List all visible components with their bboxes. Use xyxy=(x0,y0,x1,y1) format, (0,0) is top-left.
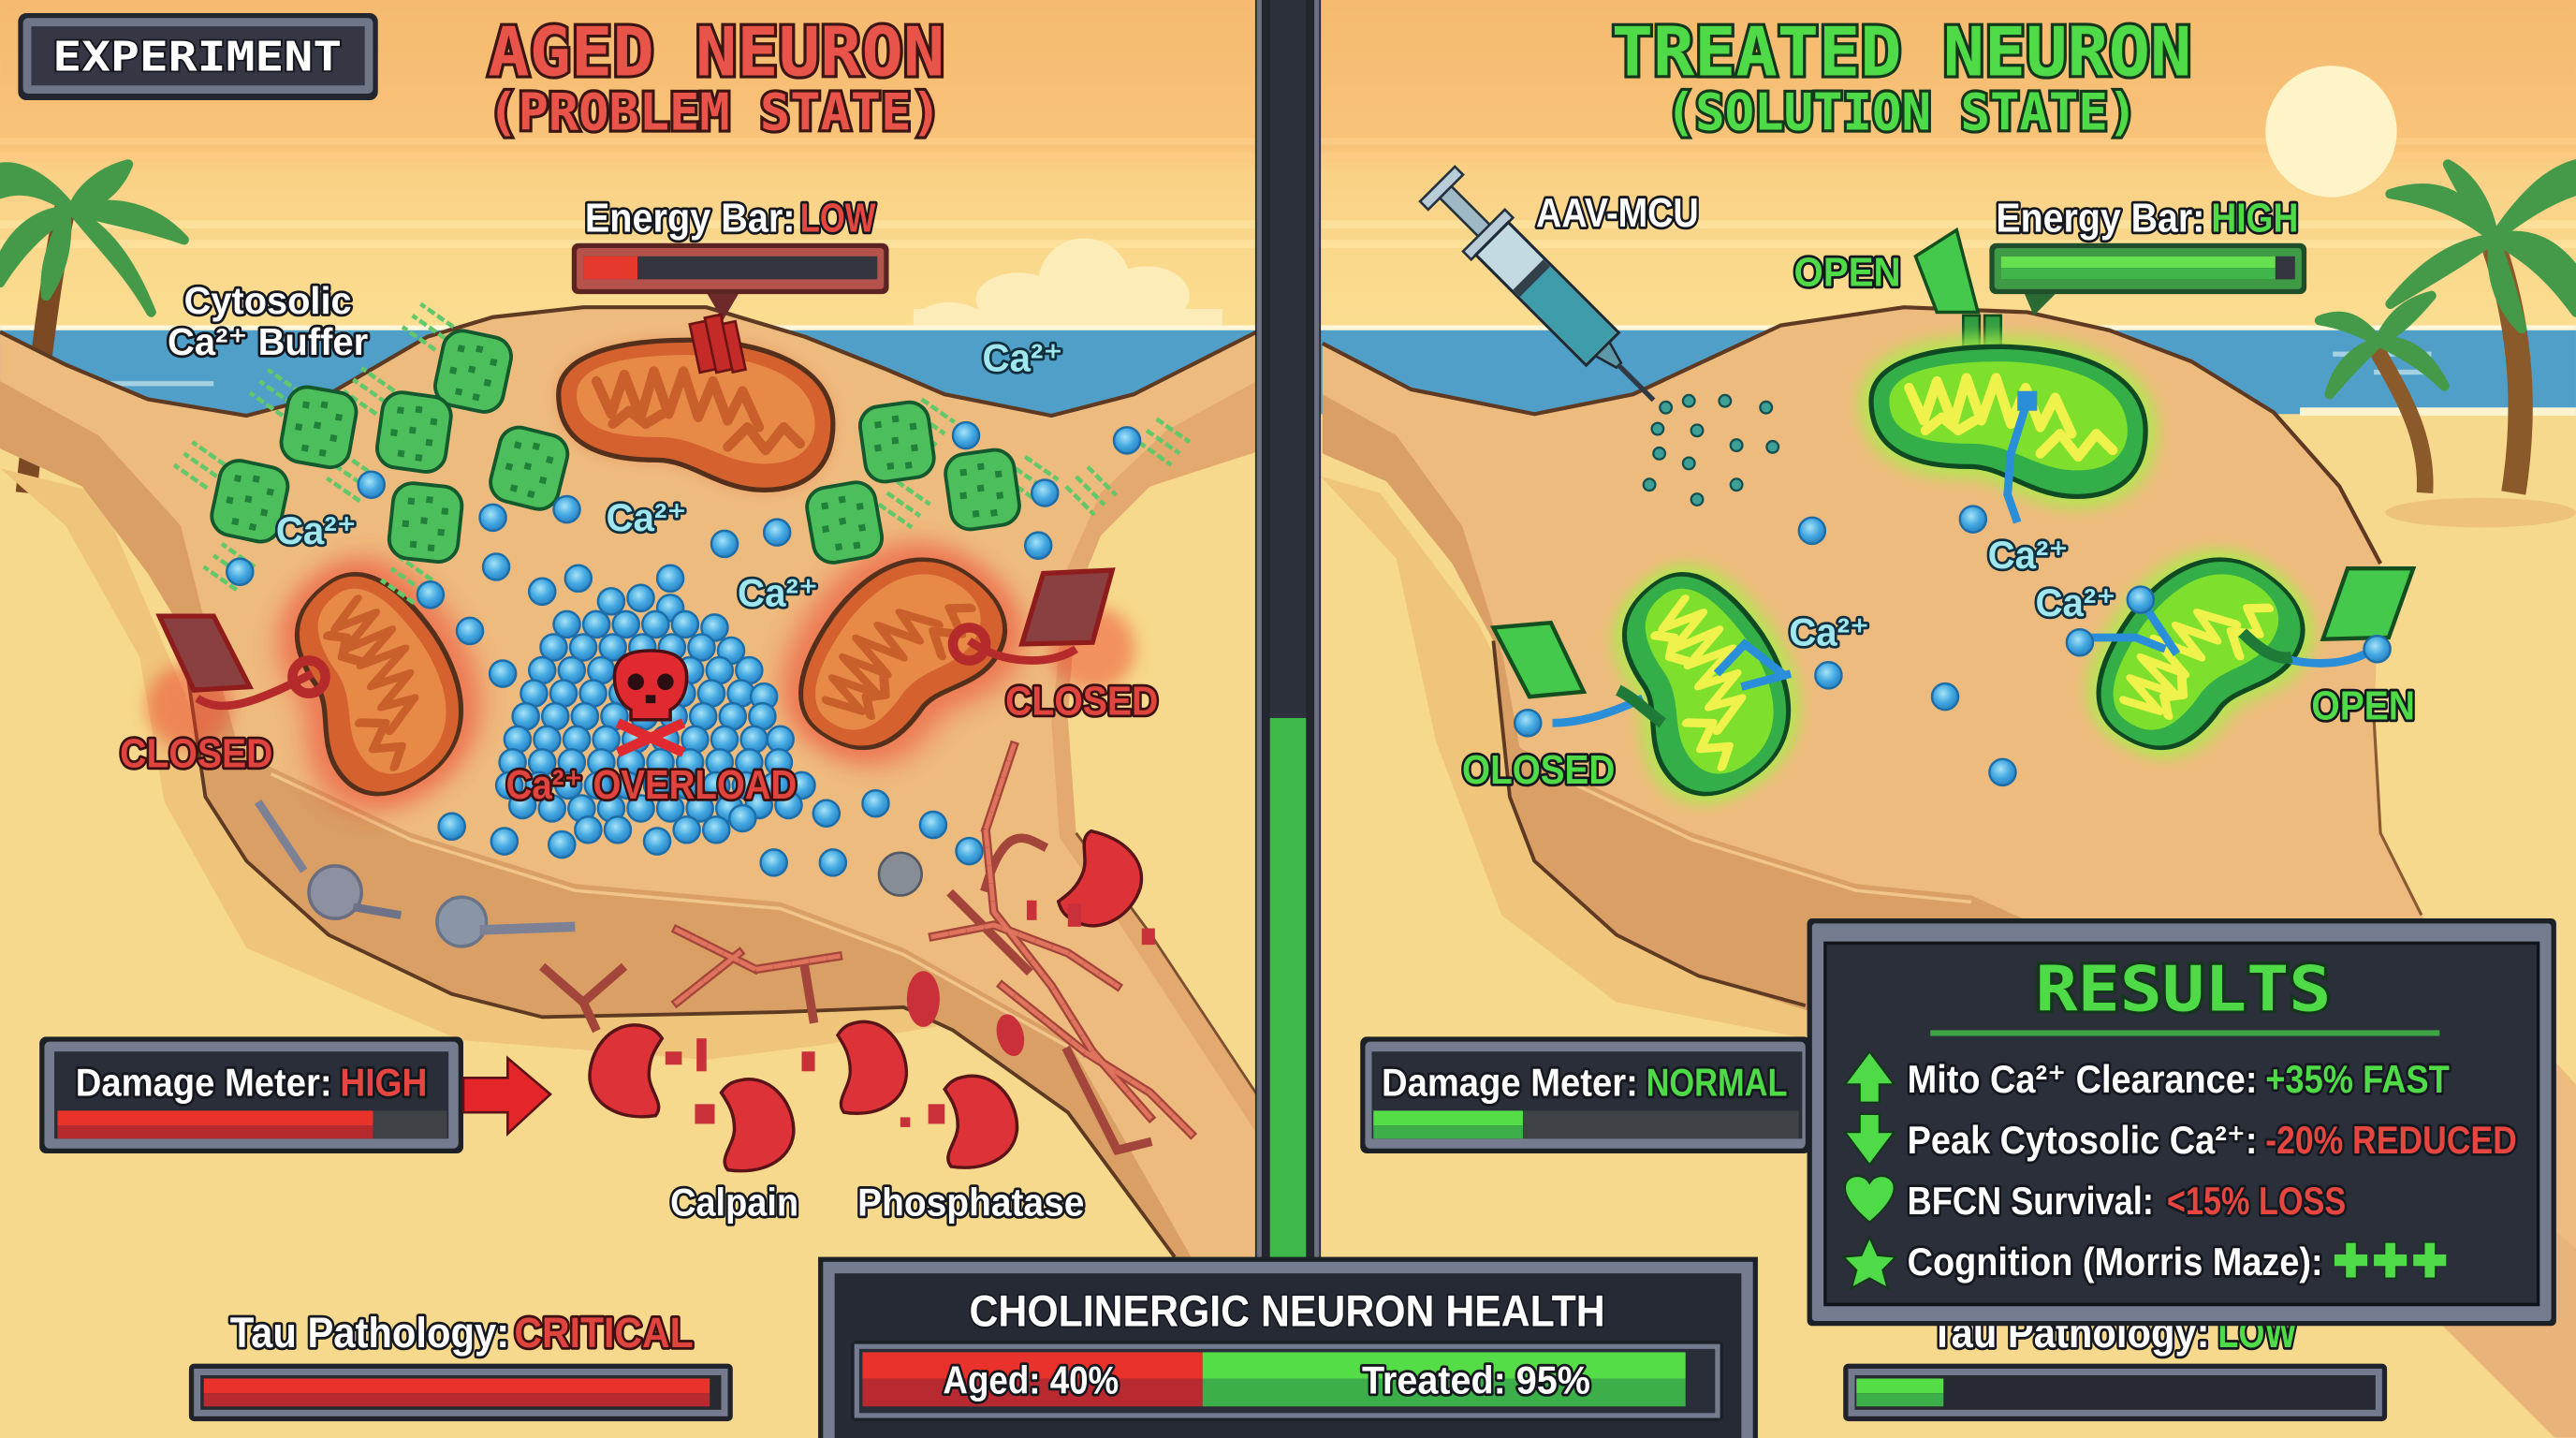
labels: closed gates: CLOSED xyxy=(120,731,272,777)
open channel gate: top xyxy=(1915,230,2001,368)
damage meter: high: Damage Meter: xyxy=(76,1061,332,1105)
labels: calcium ions, treated: Ca²⁺ xyxy=(2036,580,2116,624)
energy bar: high xyxy=(1989,195,2306,315)
icon: syringe xyxy=(1416,163,1675,421)
tau pathology: critical: CRITICAL xyxy=(514,1309,694,1357)
result row: mito calcium clearance: Mito Ca²⁺ Clearance: xyxy=(1908,1057,2257,1101)
sea xyxy=(0,325,2576,418)
tau pathology: critical: Tau Pathology: xyxy=(230,1309,509,1357)
panel: results xyxy=(1808,918,2556,1326)
title: treated neuron: TREATED NEURON xyxy=(1612,13,2191,92)
label: cytosolic buffer: Ca²⁺ Buffer xyxy=(168,320,368,363)
labels: calpain, phosphatase xyxy=(670,1181,1084,1225)
labels: calcium ions, aged xyxy=(276,336,1063,615)
palm: left xyxy=(0,165,184,493)
panel: cholinergic neuron health: CHOLINERGIC NEURON HEALTH xyxy=(970,1286,1605,1336)
result row: peak cytosolic calcium xyxy=(1845,1114,2517,1165)
open channel gate: right xyxy=(2243,568,2413,663)
mitochondrion: top, treated xyxy=(1871,346,2145,522)
arrow: damage to enzymes xyxy=(463,1058,550,1134)
labels: calcium ions, aged: Ca²⁺ xyxy=(607,495,687,539)
energy bar: low: Energy Bar: xyxy=(585,195,795,241)
tau pathology: low: Tau Pathology: xyxy=(1930,1309,2210,1357)
mitochondrion: right, treated xyxy=(2071,524,2323,790)
closed channel gate: right xyxy=(953,570,1135,692)
panel: cholinergic neuron health: Treated: 95% xyxy=(1362,1357,1590,1401)
label: open, top: OPEN xyxy=(1794,249,1901,295)
panel: cholinergic neuron health: Aged: 40% xyxy=(943,1357,1119,1401)
sun xyxy=(2265,66,2397,198)
tau pathology: low: LOW xyxy=(2217,1309,2297,1357)
palm: right large and small xyxy=(2320,165,2576,527)
labels: calcium ions, treated: Ca²⁺ xyxy=(1988,533,2069,577)
neuron body: treated xyxy=(1321,307,2576,1438)
viral particles xyxy=(1644,395,1778,506)
tau pathology: low xyxy=(1843,1309,2387,1421)
result row: peak cytosolic calcium: -20% REDUCED xyxy=(2265,1118,2517,1162)
cytosolic calcium buffers xyxy=(174,304,1190,603)
result row: BFCN survival xyxy=(1845,1176,2346,1223)
result row: BFCN survival: <15% LOSS xyxy=(2167,1179,2346,1223)
labels: calcium ions, aged: Ca²⁺ xyxy=(738,571,818,615)
panel: treated neuron (solution state) xyxy=(1321,13,2576,1438)
result row: cognition xyxy=(1843,1238,2446,1288)
labels: closed gates: CLOSED xyxy=(1005,678,1158,724)
panel: aged neuron (problem state) xyxy=(0,13,1257,1421)
damage meter: normal xyxy=(1360,1036,1810,1153)
labels: calpain, phosphatase: Phosphatase xyxy=(857,1181,1084,1225)
broken tau filaments xyxy=(546,746,1191,1151)
result row: cognition: Cognition (Morris Maze): xyxy=(1908,1240,2323,1284)
tau pathology: critical xyxy=(189,1309,733,1421)
calcium overload cluster xyxy=(227,422,1140,875)
mitochondrion: top, aged xyxy=(559,315,833,490)
energy bar: low: LOW xyxy=(800,195,876,241)
labels: gate states xyxy=(1462,683,2415,793)
badge: experiment xyxy=(18,13,378,100)
energy bar: high: HIGH xyxy=(2211,195,2298,241)
label: AAV-MCU: AAV-MCU xyxy=(1536,190,1699,236)
damage meter: high xyxy=(39,1036,463,1153)
calcium uptake into mitochondria xyxy=(1515,506,2391,785)
sand xyxy=(0,416,2576,1438)
mitochondrion: left, aged xyxy=(247,550,498,815)
labels: calcium ions, treated: Ca²⁺ xyxy=(1789,610,1869,654)
labels: closed gates xyxy=(120,678,1158,777)
mitochondrion: left, treated xyxy=(1574,550,1825,815)
labels: calcium ions, aged: Ca²⁺ xyxy=(983,336,1063,380)
damage meter: normal: NORMAL xyxy=(1647,1061,1788,1105)
title: aged neuron: (PROBLEM STATE) xyxy=(488,83,942,142)
badge: experiment: EXPERIMENT xyxy=(52,33,342,81)
open channel gate: left xyxy=(1493,623,1662,723)
activated enzymes: calpain and phosphatase xyxy=(590,828,1155,1171)
heading: results: RESULTS xyxy=(2036,952,2331,1025)
result row: BFCN survival: BFCN Survival: xyxy=(1908,1179,2154,1223)
result row: peak cytosolic calcium: Peak Cytosolic Ca²⁺: xyxy=(1908,1118,2257,1162)
title: aged neuron xyxy=(488,13,944,142)
icon: skull and crossbones xyxy=(614,651,687,753)
mitochondrion: right, aged xyxy=(774,524,1026,790)
labels: calcium ions, aged: Ca²⁺ xyxy=(276,508,357,552)
energy bar: high: Energy Bar: xyxy=(1996,195,2204,241)
labels: calcium ions, treated xyxy=(1789,533,2116,654)
label: cytosolic buffer xyxy=(168,279,368,363)
title: treated neuron: (SOLUTION STATE) xyxy=(1666,83,2137,142)
title: treated neuron xyxy=(1612,13,2191,142)
label: calcium overload: Ca²⁺ OVERLOAD xyxy=(506,762,797,808)
result row: mito calcium clearance xyxy=(1845,1051,2450,1103)
neuron body: aged xyxy=(0,307,1257,1257)
panel: cholinergic neuron health xyxy=(818,1257,1758,1438)
damage meter: normal: Damage Meter: xyxy=(1382,1061,1638,1105)
result row: mito calcium clearance: +35% FAST xyxy=(2265,1057,2450,1101)
label: cytosolic buffer: Cytosolic xyxy=(184,279,352,322)
title: aged neuron: AGED NEURON xyxy=(488,13,944,92)
center divider with health gauge xyxy=(1255,0,1321,1265)
labels: gate states: OLOSED xyxy=(1462,747,1615,793)
labels: calpain, phosphatase: Calpain xyxy=(670,1181,798,1225)
cloud xyxy=(914,238,1222,329)
labels: gate states: OPEN xyxy=(2311,683,2415,729)
energy bar: low xyxy=(572,195,889,320)
damage meter: high: HIGH xyxy=(340,1061,427,1105)
inactive gray neurites and ion xyxy=(258,801,922,946)
closed channel gate: left xyxy=(146,616,326,749)
